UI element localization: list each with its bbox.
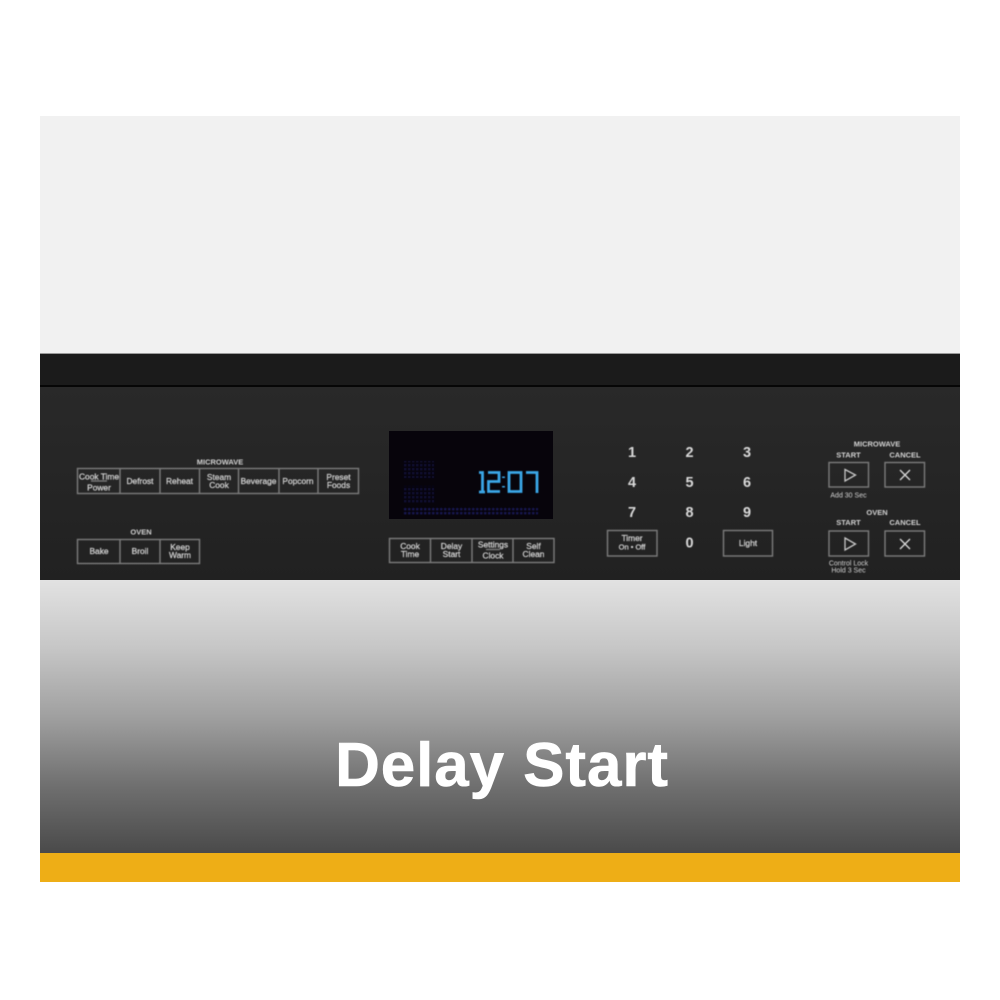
microwave function buttons: Steam bbox=[207, 472, 231, 482]
microwave function buttons: Beverage bbox=[241, 476, 277, 486]
timer button: On • Off bbox=[619, 542, 646, 552]
center buttons: Settings bbox=[478, 540, 508, 550]
microwave function buttons: Cook Time bbox=[79, 472, 119, 482]
oven control panel bbox=[40, 353, 960, 882]
oven controls: CANCEL bbox=[889, 518, 921, 527]
number keypad: 6 bbox=[743, 475, 751, 491]
timer button: Timer bbox=[621, 533, 643, 543]
center buttons: Start bbox=[443, 549, 461, 559]
center buttons: Delay bbox=[441, 541, 463, 551]
timer button bbox=[608, 530, 657, 556]
yellow accent bar bbox=[40, 853, 960, 882]
microwave controls: CANCEL bbox=[889, 450, 921, 460]
number keypad: 2 bbox=[685, 445, 694, 461]
number keypad: 9 bbox=[743, 505, 751, 521]
number keypad: 5 bbox=[685, 475, 694, 491]
number keypad bbox=[608, 445, 772, 556]
number keypad: 0 bbox=[685, 536, 694, 552]
center buttons: Time bbox=[401, 549, 419, 559]
microwave function buttons: Preset bbox=[326, 472, 351, 482]
microwave controls bbox=[829, 440, 924, 500]
display screen bbox=[389, 431, 553, 519]
center buttons: Clock bbox=[483, 550, 504, 560]
microwave function buttons: Defrost bbox=[126, 476, 154, 486]
number keypad: 7 bbox=[628, 505, 636, 521]
center buttons bbox=[390, 538, 554, 562]
title: Delay Start bbox=[335, 731, 669, 800]
lower gradient band bbox=[40, 580, 960, 853]
center buttons: Clean bbox=[523, 549, 545, 559]
microwave controls: START bbox=[836, 450, 861, 460]
number keypad: 8 bbox=[685, 505, 694, 521]
microwave function buttons bbox=[78, 458, 358, 494]
oven function buttons: Keep bbox=[170, 542, 190, 552]
oven controls: Hold 3 Sec bbox=[831, 568, 866, 574]
microwave function buttons: Foods bbox=[327, 480, 350, 490]
microwave label: MICROWAVE bbox=[197, 458, 243, 466]
oven controls: OVEN bbox=[866, 508, 888, 517]
oven function buttons bbox=[78, 528, 200, 564]
number keypad: 3 bbox=[743, 445, 751, 461]
upper light background panel bbox=[40, 116, 960, 354]
oven controls: START bbox=[836, 518, 861, 527]
start and cancel controls bbox=[829, 440, 924, 574]
light button bbox=[724, 530, 772, 556]
center buttons: Self bbox=[526, 541, 541, 551]
microwave function buttons: Reheat bbox=[166, 476, 194, 486]
dim segment marks bbox=[403, 461, 538, 516]
microwave function buttons: Power bbox=[87, 482, 111, 492]
number keypad: 4 bbox=[628, 475, 636, 491]
microwave controls: Add 30 Sec bbox=[830, 492, 867, 500]
oven function buttons: Bake bbox=[89, 546, 109, 556]
center buttons: Cook bbox=[400, 541, 421, 551]
light button: Light bbox=[739, 538, 758, 548]
microwave function buttons: Popcorn bbox=[282, 476, 314, 486]
oven function buttons: Warm bbox=[169, 550, 191, 560]
oven controls: Control Lock bbox=[829, 560, 869, 568]
microwave function buttons: Cook bbox=[209, 480, 230, 490]
oven function buttons: Broil bbox=[132, 546, 149, 556]
oven label: OVEN bbox=[130, 528, 152, 536]
oven controls bbox=[829, 508, 924, 574]
microwave controls: MICROWAVE bbox=[854, 440, 900, 448]
number keypad: 1 bbox=[628, 445, 636, 461]
clock digits 12:07 bbox=[479, 472, 537, 493]
